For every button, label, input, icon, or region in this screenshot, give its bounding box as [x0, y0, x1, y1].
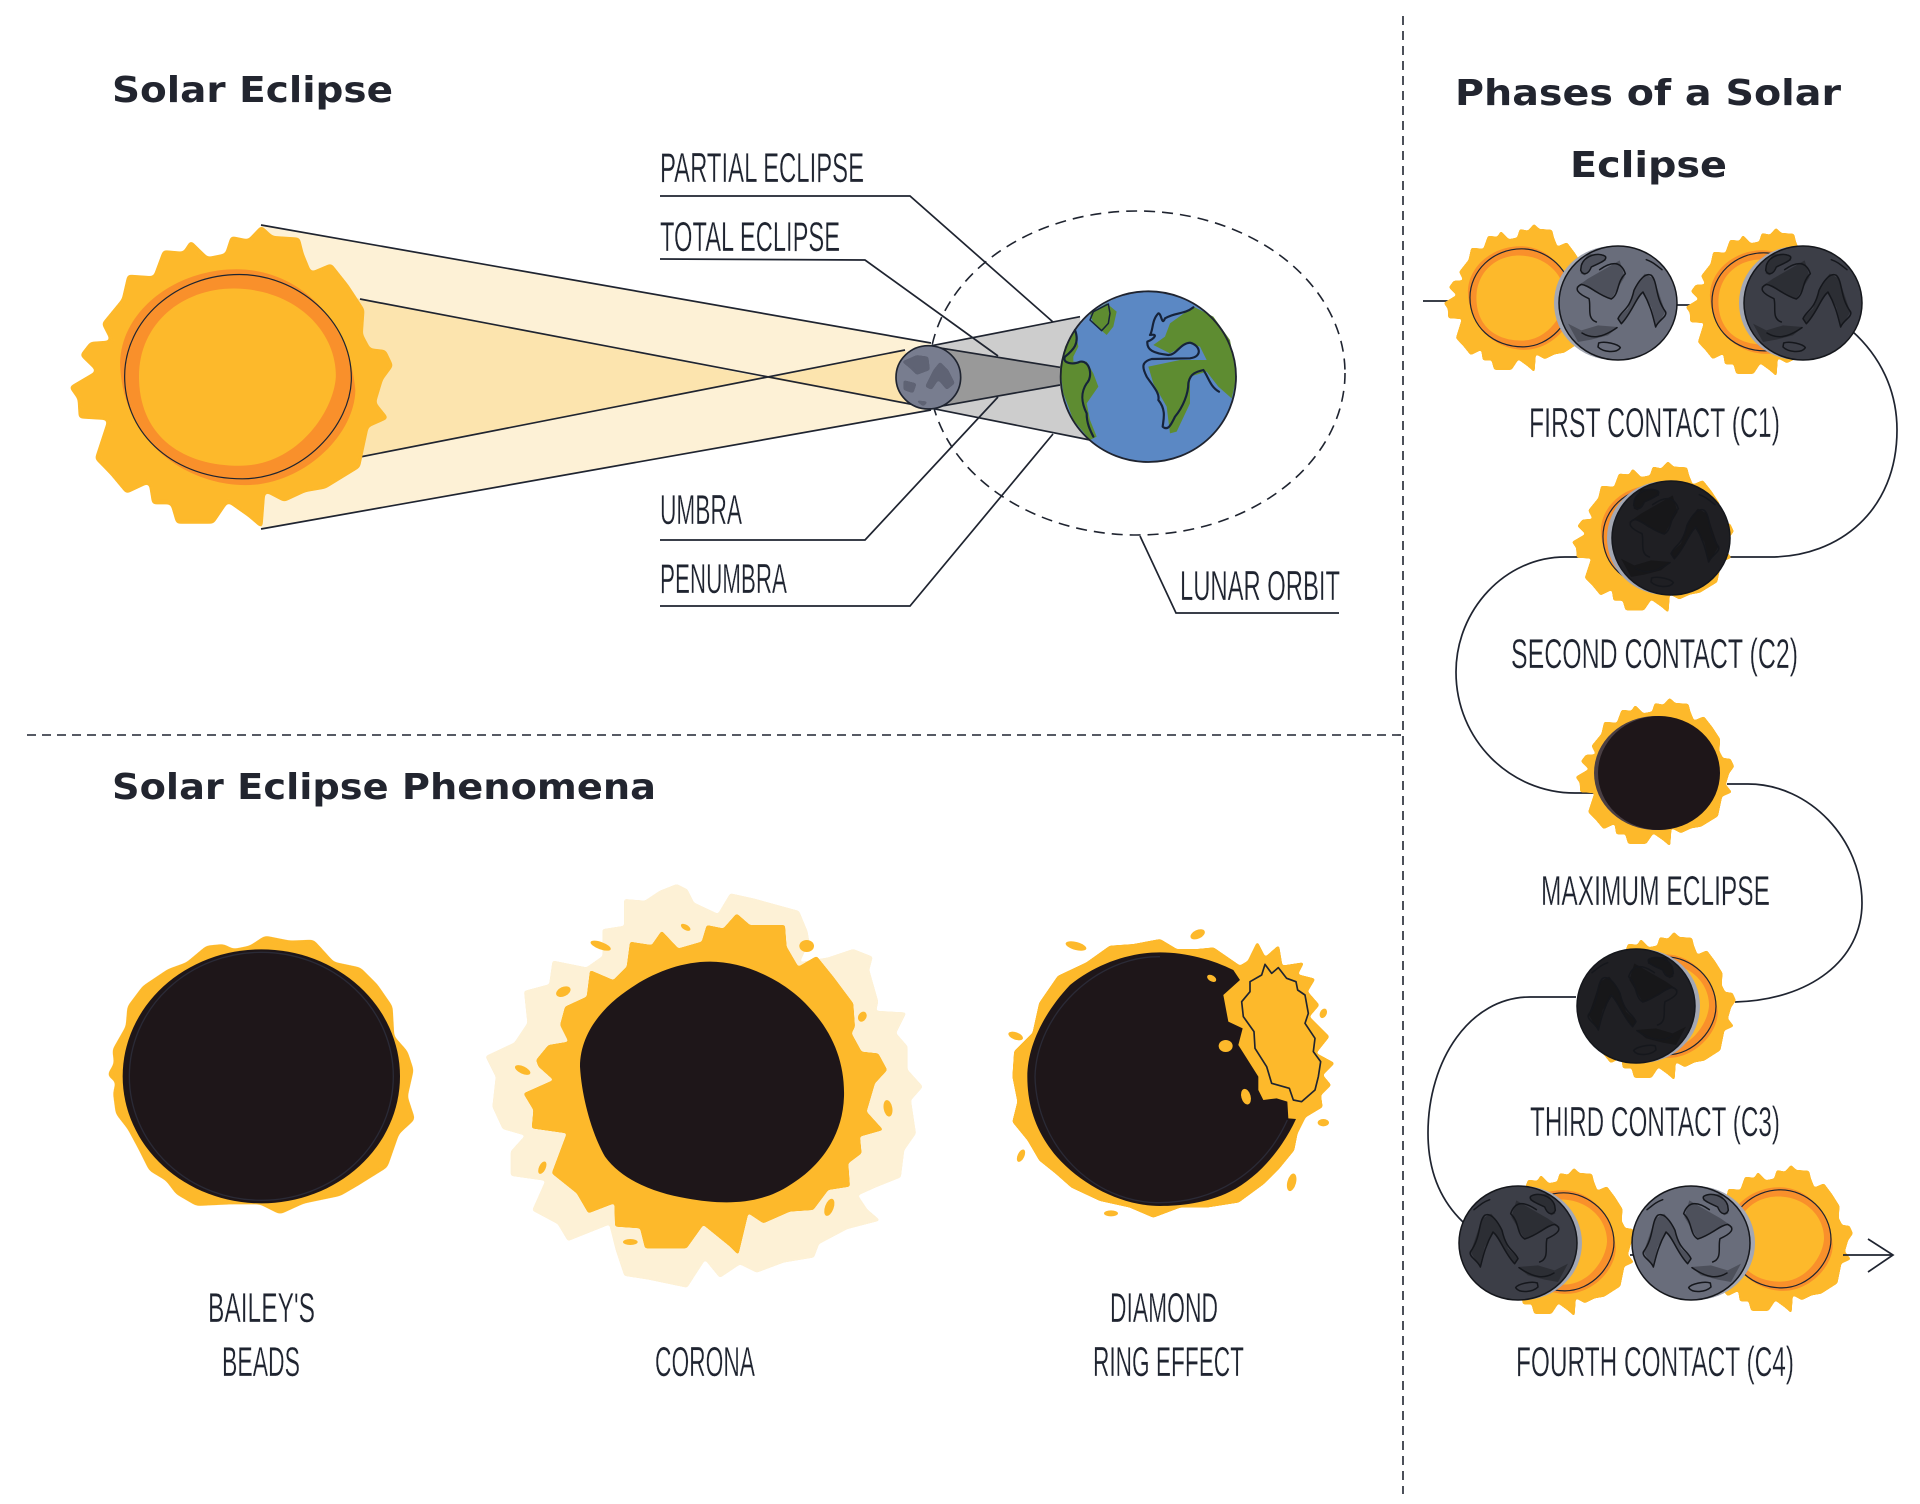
label: lunar orbit: LUNAR ORBIT	[1180, 562, 1340, 609]
heading: phases: Phases of a Solar	[1455, 73, 1841, 114]
label: maximum eclipse: MAXIMUM ECLIPSE	[1541, 867, 1770, 914]
panel: phases of a solar eclipse	[1423, 73, 1897, 1385]
heading: phases	[1455, 73, 1841, 186]
label: bailey's beads: BEADS	[222, 1338, 300, 1385]
panel: solar eclipse phenomena	[108, 767, 1333, 1385]
icon: sun	[69, 225, 393, 529]
label: total eclipse	[660, 213, 998, 356]
label: diamond ring effect: DIAMOND	[1110, 1284, 1218, 1331]
label: diamond ring effect: RING EFFECT	[1093, 1338, 1244, 1385]
label: umbra: UMBRA	[660, 486, 742, 533]
phase: maximum eclipse	[1575, 698, 1734, 846]
icon: diamond ring effect	[1007, 927, 1333, 1217]
icon: corona	[487, 885, 922, 1287]
label: partial eclipse: PARTIAL ECLIPSE	[660, 144, 864, 191]
panel: solar eclipse diagram	[69, 70, 1345, 613]
phase: fourth contact b	[1632, 1165, 1853, 1313]
label: corona: CORONA	[655, 1338, 755, 1385]
connector path	[1423, 301, 1897, 1255]
phase: fourth contact a	[1459, 1168, 1636, 1316]
label: penumbra: PENUMBRA	[660, 555, 787, 602]
label: lunar orbit	[1140, 536, 1340, 613]
icon: moon	[896, 346, 961, 409]
label: bailey's beads: BAILEY'S	[208, 1284, 315, 1331]
label: diamond ring effect	[1093, 1284, 1244, 1385]
lunar orbit	[929, 211, 1345, 535]
arrow: end of sequence	[1843, 1239, 1893, 1272]
horizontal section divider	[27, 734, 1403, 736]
phase: third contact	[1577, 932, 1736, 1080]
shadow cones	[932, 317, 1090, 440]
penumbra light beam	[261, 225, 931, 529]
label: umbra	[660, 397, 998, 540]
label: penumbra	[660, 434, 1053, 606]
heading: solar eclipse: Solar Eclipse	[112, 70, 393, 111]
phase: first contact b	[1686, 228, 1862, 376]
umbra light beam	[340, 295, 931, 461]
heading: phenomena: Solar Eclipse Phenomena	[112, 767, 656, 808]
heading: phases: Eclipse	[1570, 145, 1727, 186]
icon: earth	[1060, 291, 1237, 463]
beam outlines	[261, 225, 931, 529]
vertical section divider	[1402, 16, 1404, 1494]
label: total eclipse: TOTAL ECLIPSE	[660, 213, 840, 260]
icon: bailey's beads	[108, 937, 414, 1213]
label: partial eclipse	[660, 144, 1053, 322]
phase: second contact	[1572, 461, 1734, 613]
label: bailey's beads	[208, 1284, 315, 1385]
phase: first contact a	[1444, 224, 1677, 372]
